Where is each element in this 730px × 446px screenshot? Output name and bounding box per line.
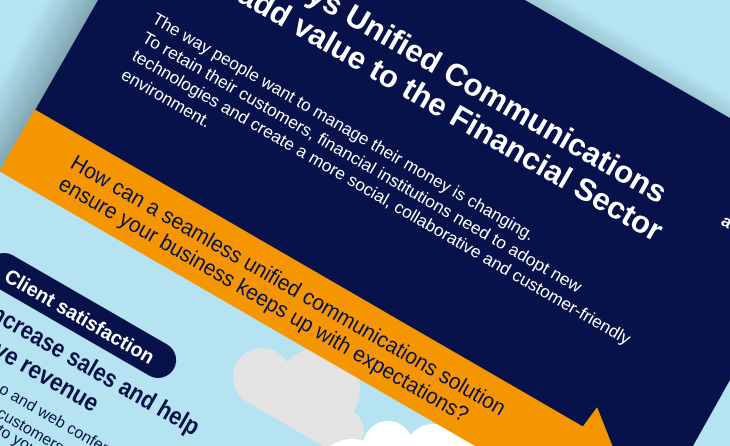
- intro text: technologies and create a more social, collaborative and customer-friendly: [129, 46, 634, 349]
- icon: white cloud: [324, 421, 478, 446]
- icon: grey cloud: [233, 348, 364, 446]
- banner question: How can a seamless unified communications solution: [66, 150, 510, 420]
- pill: client satisfaction: Client satisfaction: [1, 265, 158, 369]
- intro text: environment.: [118, 65, 214, 131]
- panel: orange question banner: [0, 110, 612, 446]
- banner question: ensure your business keeps up with expectations?: [54, 171, 473, 427]
- pill: client satisfaction: [0, 246, 183, 385]
- intro text: To retain their customers, financial institutions need to adopt new: [139, 28, 586, 297]
- panel shadow: [0, 0, 730, 171]
- intro text: The way people want to manage their money is changing.: [149, 9, 538, 244]
